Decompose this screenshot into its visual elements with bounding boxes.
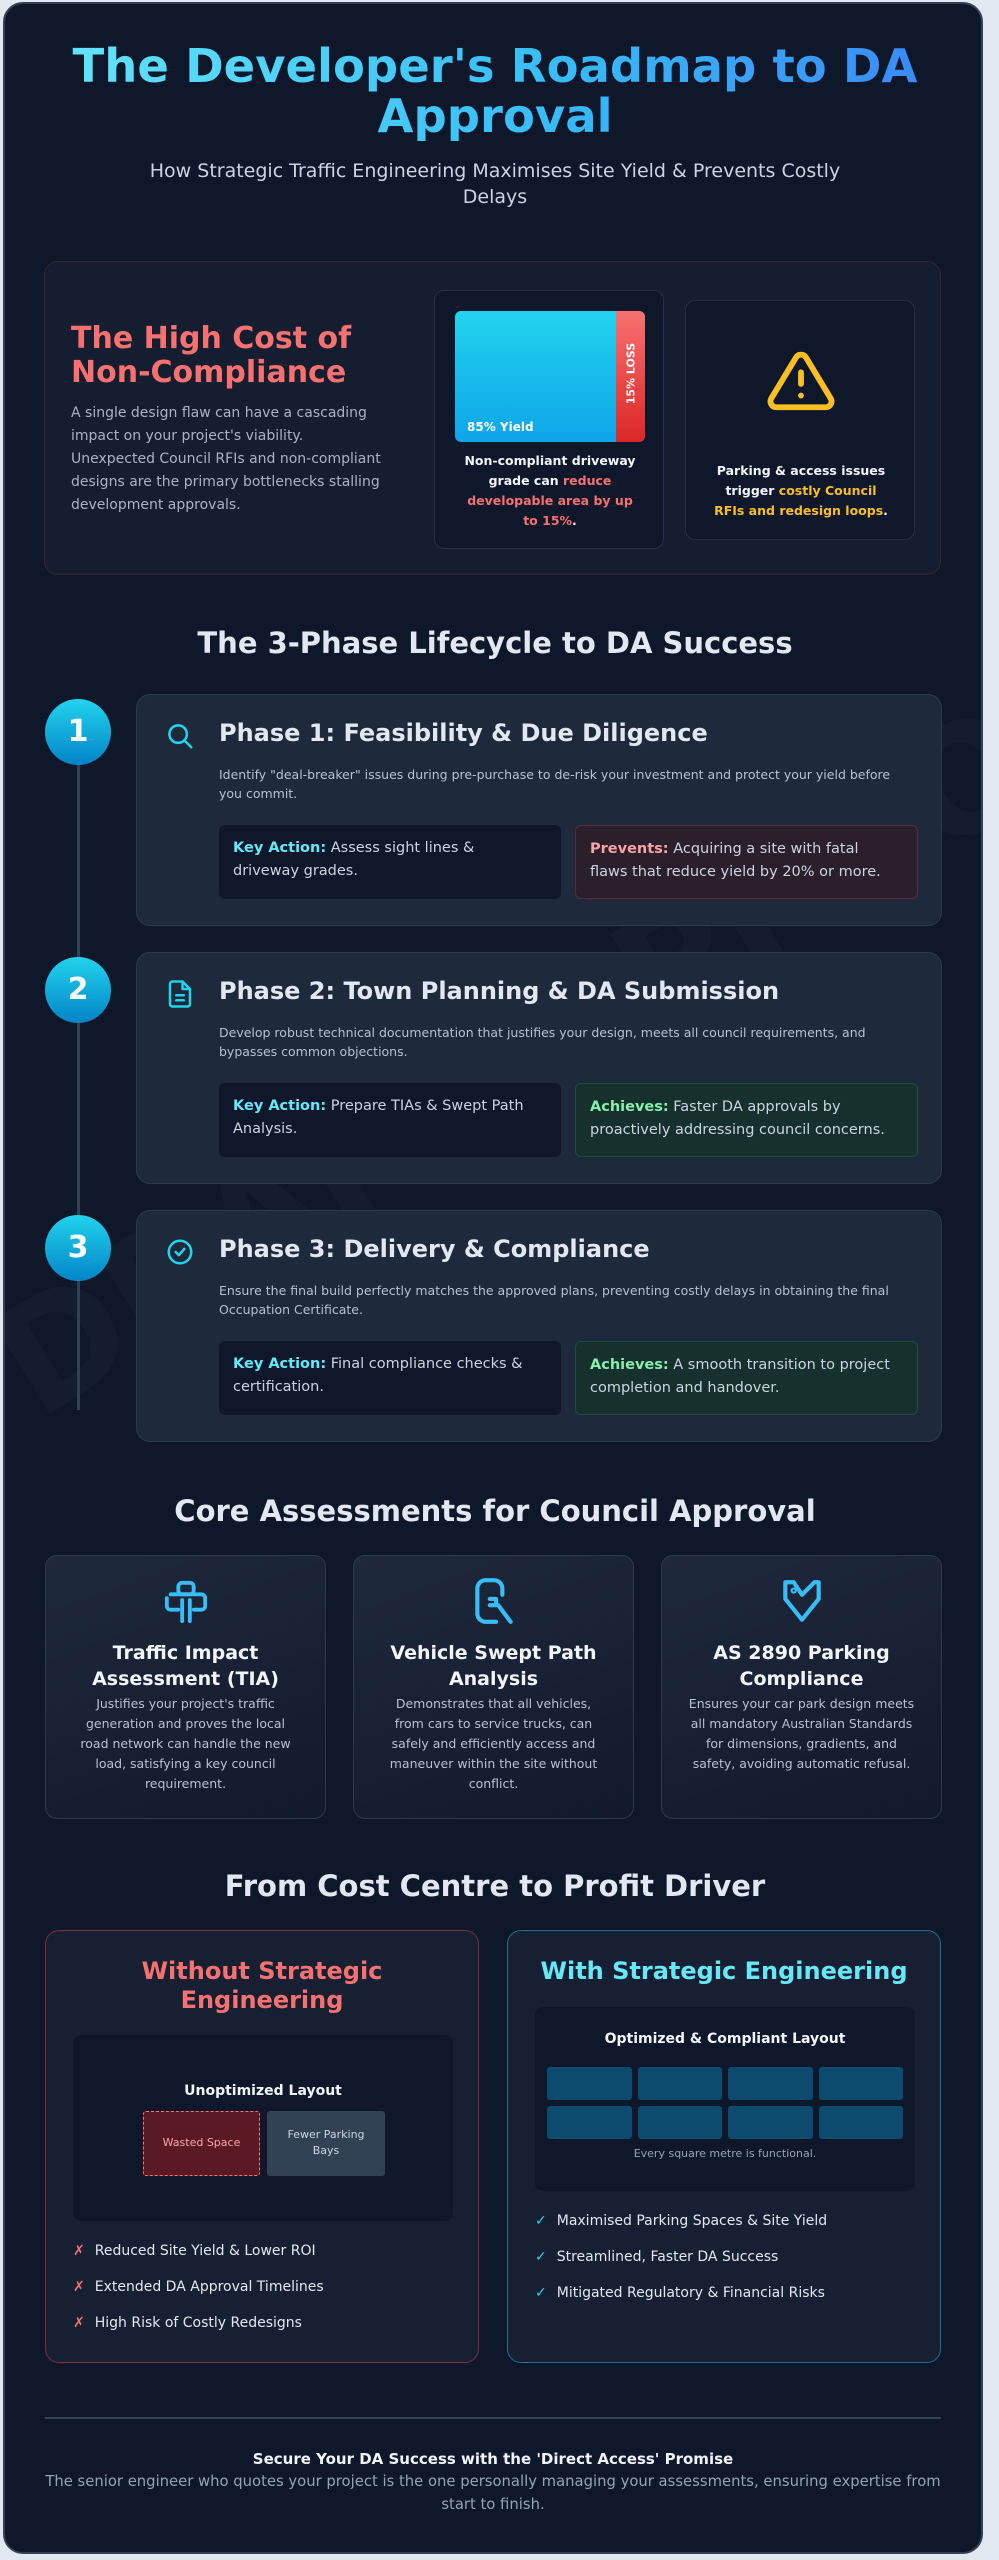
bar chart: 85% Yield bbox=[467, 420, 534, 434]
key action: Key Action: Assess sight lines & bbox=[233, 840, 474, 856]
bar chart: 15% LOSS bbox=[624, 343, 638, 404]
heading: Engineering bbox=[181, 1986, 343, 2014]
achieves bbox=[575, 1083, 918, 1157]
icon: search bbox=[168, 724, 192, 749]
panel: phase 2 bbox=[136, 952, 942, 1184]
panel: phase 1 bbox=[136, 694, 942, 926]
stat card: yield loss bbox=[434, 290, 664, 549]
text block: impact on your project's viability. bbox=[71, 428, 303, 444]
caption: to 15%. bbox=[523, 513, 577, 528]
panel: TIA bbox=[45, 1555, 326, 1819]
caption: trigger costly Council bbox=[725, 483, 877, 498]
circle 2: 2 bbox=[68, 972, 88, 1007]
layout diagram: optimized bbox=[535, 2007, 915, 2191]
layout diagram: unoptimized: Wasted Space bbox=[163, 2136, 240, 2149]
description: Develop robust technical documentation that justifies your design, meets all council requirements, and bypasses common objections. bbox=[219, 1025, 866, 1059]
footer: The senior engineer who quotes your project is the one personally managing your assessments, ensuring expertise from bbox=[45, 2473, 941, 2490]
key action: certification. bbox=[233, 1379, 324, 1395]
description: Demonstrates that all vehicles, from cars to service trucks, can safely and efficiently access and maneuver within the site without conflict. bbox=[390, 1696, 597, 1791]
timeline line bbox=[77, 744, 80, 1410]
stat card: council RFIs bbox=[685, 300, 915, 540]
title: Approval bbox=[377, 89, 613, 143]
icon: warning bbox=[768, 352, 834, 410]
panel: without strategic engineering bbox=[45, 1930, 479, 2363]
heading: Phase 1: Feasibility & Due Diligence bbox=[219, 719, 708, 747]
description: Ensures your car park design meets all mandatory Australian Standards for dimensions, gradients, and safety, avoiding automatic refusal. bbox=[689, 1696, 914, 1771]
heading: With Strategic Engineering bbox=[540, 1957, 908, 1985]
achieves: Achieves: A smooth transition to project bbox=[590, 1357, 890, 1373]
achieves: Achieves: Faster DA approvals by bbox=[590, 1099, 841, 1115]
description: Ensure the final build perfectly matches the approved plans, preventing costly delays in obtaining the final Occupation Certificate. bbox=[219, 1283, 889, 1317]
list: benefits bbox=[535, 2213, 827, 2301]
layout diagram: unoptimized: Fewer Parking bbox=[287, 2128, 365, 2141]
icon: traffic bbox=[164, 1580, 208, 1624]
list: drawbacks: ✗ High Risk of Costly Redesigns bbox=[73, 2315, 302, 2331]
layout diagram: optimized: Every square metre is functional. bbox=[634, 2147, 816, 2160]
layout diagram: unoptimized bbox=[73, 2035, 453, 2221]
heading bbox=[71, 321, 352, 390]
text block: designs are the primary bottlenecks stalling bbox=[71, 474, 380, 490]
caption: grade can reduce bbox=[489, 473, 611, 488]
list: drawbacks: ✗ Reduced Site Yield & Lower ROI bbox=[73, 2243, 316, 2259]
panel: high cost of non-compliance bbox=[44, 261, 941, 575]
text block: development approvals. bbox=[71, 497, 241, 513]
heading: lifecycle: The 3-Phase Lifecycle to DA Success bbox=[197, 626, 793, 660]
title: Vehicle Swept Path Analysis bbox=[390, 1642, 597, 1690]
caption: Parking & access issues bbox=[717, 463, 885, 478]
footer: start to finish. bbox=[441, 2496, 545, 2513]
text block: Unexpected Council RFIs and non-compliant bbox=[71, 451, 381, 467]
heading: core assessments: Core Assessments for Council Approval bbox=[174, 1494, 816, 1528]
caption: Non-compliant driveway bbox=[464, 453, 636, 468]
description: Identify "deal-breaker" issues during pre-purchase to de-risk your investment and protect your yield before you commit. bbox=[219, 767, 890, 801]
panel: phase 3 bbox=[136, 1210, 942, 1442]
circle 1: 1 bbox=[68, 714, 88, 749]
description: Justifies your project's traffic generation and proves the local road network can handle the new load, satisfying a key council requirement. bbox=[80, 1696, 291, 1791]
prevents bbox=[575, 825, 918, 899]
caption: RFIs and redesign loops. bbox=[714, 503, 888, 518]
icon: document bbox=[168, 980, 192, 1008]
layout diagram: unoptimized: Bays bbox=[313, 2144, 339, 2157]
key action: Key Action: Final compliance checks & bbox=[233, 1356, 522, 1372]
title bbox=[5, 41, 985, 141]
panel: AS 2890 bbox=[661, 1555, 942, 1819]
caption bbox=[464, 453, 636, 528]
heading: cost centre to profit driver: From Cost Centre to Profit Driver bbox=[225, 1869, 765, 1903]
caption bbox=[714, 463, 888, 518]
prevents: Prevents: Acquiring a site with fatal bbox=[590, 841, 859, 857]
prevents: flaws that reduce yield by 20% or more. bbox=[590, 864, 881, 880]
achieves: completion and handover. bbox=[590, 1380, 779, 1396]
list: benefits: ✓ Mitigated Regulatory & Financial Risks bbox=[535, 2285, 825, 2301]
key action bbox=[219, 1083, 561, 1157]
achieves bbox=[575, 1341, 918, 1415]
heading: Phase 2: Town Planning & DA Submission bbox=[219, 977, 779, 1005]
key action: Key Action: Prepare TIAs & Swept Path bbox=[233, 1098, 524, 1114]
icon: parking tag bbox=[783, 1580, 821, 1622]
circle 3 bbox=[45, 1215, 111, 1281]
footer bbox=[45, 2450, 941, 2513]
heading: Non-Compliance bbox=[71, 355, 346, 390]
title: AS 2890 Parking Compliance bbox=[713, 1642, 890, 1690]
heading: Phase 3: Delivery & Compliance bbox=[219, 1235, 650, 1263]
icon: swept path bbox=[475, 1578, 513, 1624]
key action: driveway grades. bbox=[233, 863, 358, 879]
circle 2 bbox=[45, 957, 111, 1023]
bar chart bbox=[455, 311, 645, 442]
list: benefits: ✓ Maximised Parking Spaces & Site Yield bbox=[535, 2213, 827, 2229]
achieves: proactively addressing council concerns. bbox=[590, 1122, 885, 1138]
caption: developable area by up bbox=[467, 493, 633, 508]
key action bbox=[219, 1341, 561, 1415]
layout diagram: optimized: Optimized & Compliant Layout bbox=[605, 2031, 845, 2047]
heading: The High Cost of bbox=[71, 321, 351, 356]
key action bbox=[219, 825, 561, 899]
panel: swept path bbox=[353, 1555, 634, 1819]
text block bbox=[71, 405, 381, 513]
footer: Secure Your DA Success with the 'Direct Access' Promise bbox=[253, 2450, 733, 2468]
circle 1 bbox=[45, 699, 111, 765]
title: Traffic Impact Assessment (TIA) bbox=[92, 1642, 279, 1690]
heading: Without Strategic bbox=[142, 1957, 382, 1985]
circle 3: 3 bbox=[68, 1230, 88, 1265]
layout diagram: unoptimized: Unoptimized Layout bbox=[184, 2083, 342, 2099]
heading bbox=[142, 1957, 382, 2014]
list: drawbacks bbox=[73, 2243, 324, 2331]
list: benefits: ✓ Streamlined, Faster DA Success bbox=[535, 2249, 778, 2265]
key action: Analysis. bbox=[233, 1121, 297, 1137]
subtitle: How Strategic Traffic Engineering Maximises Site Yield & Prevents Costly Delays bbox=[150, 160, 840, 208]
list: drawbacks: ✗ Extended DA Approval Timelines bbox=[73, 2279, 324, 2295]
icon: check circle bbox=[168, 1240, 192, 1264]
title: The Developer's Roadmap to DA bbox=[73, 39, 917, 93]
panel: with strategic engineering bbox=[507, 1930, 941, 2363]
text block: A single design flaw can have a cascading bbox=[71, 405, 367, 421]
